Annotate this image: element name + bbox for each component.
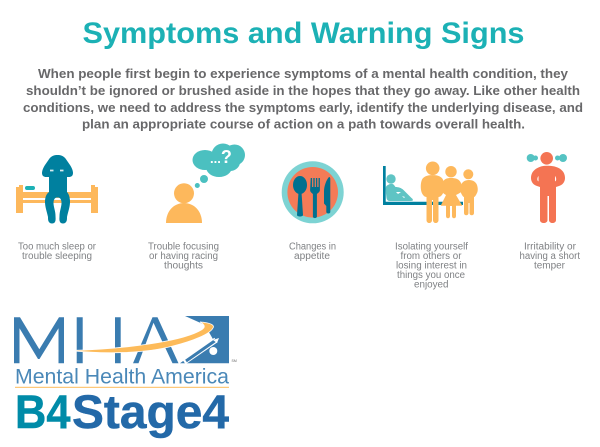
intro text block: plan an appropriate course of action on a path towards overall health.: [82, 116, 525, 132]
caption: isolation: enjoyed: [414, 280, 448, 290]
caption: irritability: having a short: [520, 251, 580, 262]
caption: isolation: losing interest in: [396, 260, 467, 272]
logo divider: [15, 387, 229, 388]
caption: focus: Trouble focusing: [148, 242, 219, 252]
caption: irritability: [520, 242, 580, 272]
intro text block: When people first begin to experience symptoms of a mental health condition, they: [38, 66, 569, 81]
caption: focus: thoughts: [164, 260, 203, 272]
logo name: Mental Health America: [15, 364, 229, 388]
logo flag: [180, 316, 229, 363]
icon: irritable person with steam: [527, 152, 567, 223]
intro text block: shouldn’t be ignored or brushed aside in the hopes that they go away. Like other health: [26, 83, 580, 98]
caption: isolation: things you once: [397, 270, 465, 281]
caption: isolation: [395, 242, 468, 290]
logo letters MHA: [14, 317, 178, 363]
caption: isolation: from others or: [400, 251, 462, 262]
icon: person with thought bubble: [166, 144, 245, 223]
caption: focus: or having racing: [149, 251, 218, 262]
icon: isolated figure and group of people: [383, 162, 478, 223]
caption: focus: [148, 242, 219, 272]
logo SM mark: SM: [232, 359, 237, 363]
caption: irritability: temper: [534, 260, 566, 272]
caption: sleep: Too much sleep or: [18, 242, 97, 252]
caption: appetite: appetite: [294, 251, 330, 262]
intro text block: conditions, we need to address the symptoms early, identify the underlying disease, and: [23, 100, 583, 115]
caption: sleep: [18, 242, 97, 262]
logo Stage4: Stage4: [72, 385, 229, 438]
title: Symptoms and Warning Signs: [82, 17, 524, 50]
caption: sleep: trouble sleeping: [22, 251, 92, 262]
logo B4: B4: [15, 385, 70, 438]
logo swoosh: [69, 322, 213, 353]
icon: plate with cutlery: [282, 161, 344, 223]
logo rocket: [184, 338, 219, 362]
caption: appetite: [289, 242, 336, 262]
logo: Mental Health America B4Stage4: [14, 316, 237, 438]
intro text block: [23, 66, 583, 132]
icon: person with thought bubble: ...?: [210, 147, 232, 167]
caption: appetite: Changes in: [289, 242, 336, 252]
caption: isolation: Isolating yourself: [395, 242, 468, 252]
icon: person sitting on bed: [16, 155, 98, 224]
caption: irritability: Irritability or: [524, 242, 577, 252]
